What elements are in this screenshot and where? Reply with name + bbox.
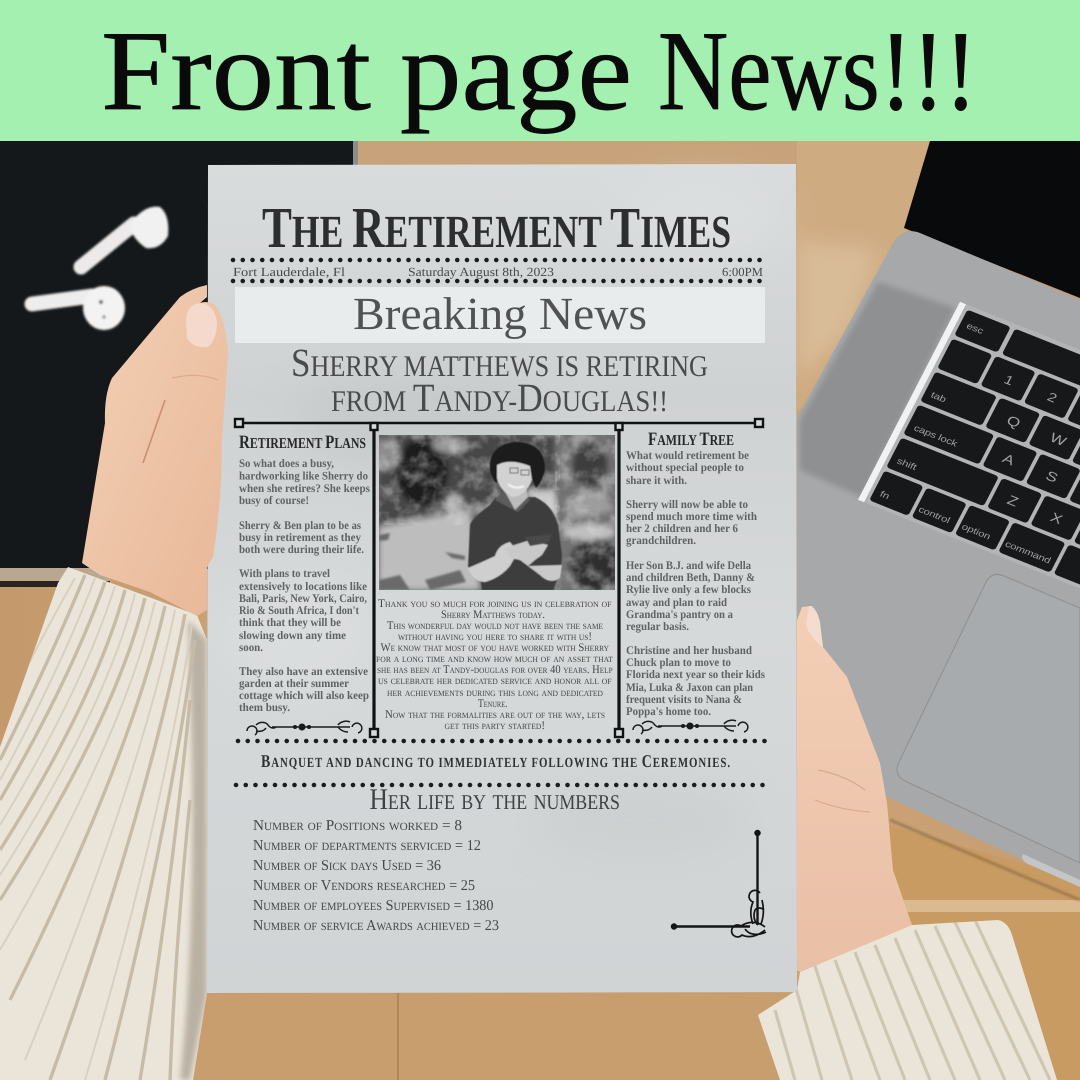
thumbnail [186,303,217,347]
retirement plans body text: busy of course! [239,494,309,507]
paper mottling [230,180,780,860]
panel: family tree [626,429,765,734]
retirement plans body text: So what does a busy, [239,457,334,470]
banquet notice: BANQUET AND DANCING TO IMMEDIATELY FOLLOWING THE CEREMONIES. [261,751,731,771]
banner title: News!!! [658,7,977,134]
center message: her achievements during this long and dedicated [387,686,603,699]
retirement plans body text: slowing down any time [239,629,346,642]
numbers heading: Her life by the numbers [370,783,620,816]
masthead title: THE RETIREMENT TIMES [262,195,731,260]
left flourish [247,721,362,735]
numbers list: Number of employees Supervised = 1380 [253,898,494,914]
numbers list: Number of service Awards achieved = 23 [253,918,499,934]
dateline: 6:00PM [722,265,763,279]
family tree heading: FAMILY TREE [648,429,734,450]
numbers list: Number of Vendors researched = 25 [253,878,475,894]
family tree body text: Poppa's home too. [626,705,711,718]
family tree body text: Christine and her husband [626,644,753,657]
family tree body text: Grandma's pantry on a [626,608,733,621]
retirement plans body text: With plans to travel [239,567,331,580]
retirement plans body text: both were during their life. [239,543,364,556]
center message: Sherry Matthews today. [441,608,545,621]
center message: Thank you so much for joining us in celebration of [378,597,612,610]
keyboard [849,290,1080,801]
laptop screen [904,141,1080,298]
retirement plans body text: Bali, Paris, New York, Cairo, [239,592,367,605]
family tree body text: Mia, Luka & Jaxon can plan [626,681,753,694]
retirement plans body text: Rio & South Africa, I don't [239,604,359,617]
fingernail [806,606,823,647]
right sweater sleeve [750,915,1070,1080]
dotted divider above banquet [238,739,767,743]
retirement plans body text [239,457,370,714]
header banner [0,0,1080,141]
retirement plans body text: cottage which will also keep [239,689,369,702]
family tree body text: regular basis. [626,620,689,633]
right hand holding the page [797,606,912,972]
numbers list: Number of Sick days Used = 36 [253,858,441,874]
center message: Now that the formalities are out of the way, lets [385,708,605,721]
dateline [233,260,763,281]
dateline: Fort Lauderdale, Fl [233,265,346,279]
center message: for a long time and know how much of an asset that [376,652,613,665]
trackpad [897,574,1080,863]
banner title [101,7,977,134]
center message: us celebrate her dedicated service and honor all of [378,674,612,687]
road shadows [379,533,466,590]
dateline: Saturday August 8th, 2023 [408,265,554,279]
family tree body text: without special people to [626,461,744,474]
numbers list: Number of departments serviced = 12 [253,838,481,854]
laptop [797,141,1080,887]
retirement plans body text: extensively to locations like [239,580,367,593]
center message: This wonderful day would not have been the same [387,619,603,632]
newspaper page [207,164,797,993]
retirement plans body text: Sherry & Ben plan to be as [239,519,361,532]
center message: Tenure. [478,697,508,710]
banner title: page [400,7,632,134]
numbers list: Number of Positions worked = 8 [253,818,462,834]
family tree body text: Sherry will now be able to [626,498,748,511]
column frame [235,419,763,737]
photo: smiling retiree [369,435,621,591]
paper sheet [207,164,797,993]
center message: she has been at Tandy-douglas for over 40 years. Help [377,663,613,676]
family tree body text: grandchildren. [626,534,696,547]
breaking news banner: Breaking News [353,288,647,339]
headline: FROM TANDY-DOUGLAS!! [331,375,668,420]
center message: without having you here to share it with us! [398,630,592,643]
retirement plans body text: them busy. [239,701,290,714]
headline: SHERRY MATTHEWS IS RETIRING [291,340,708,385]
dotted divider below banquet [236,783,767,787]
family tree body text: frequent visits to Nana & [626,693,742,706]
left sweater sleeve [0,560,210,1080]
retirement plans body text: garden at their summer [239,677,349,690]
dark notebook [0,141,358,587]
retirement plans body text: hardworking like Sherry do [239,470,368,482]
breaking news banner [235,287,765,343]
retirement plans body text: think that they will be [239,616,341,629]
center message [376,597,613,732]
family tree body text: Chuck plan to move to [626,656,731,669]
numbers list [253,818,499,934]
woman [468,442,562,590]
icon: earbuds [32,207,168,330]
family tree body text [626,449,765,718]
left hand holding the page [82,285,228,616]
corner ornament [672,831,766,937]
banner title: Front [101,7,371,134]
family tree body text: her 2 children and her 6 [626,522,738,535]
family tree body text: Rylie live only a few blocks [626,583,751,596]
family tree body text: share it with. [626,474,687,487]
retirement plans body text: soon. [239,641,263,654]
retirement plans body text: They also have an extensive [239,665,368,678]
laptop body [797,231,1080,886]
headline [291,340,708,420]
family tree body text: Florida next year so their kids [626,668,765,681]
center message: get this party started! [444,719,545,732]
center message: We know that most of you have worked with Sherry [380,641,609,654]
family tree body text: spend much more time with [626,510,758,523]
retirement plans body text: busy in retirement as they [239,531,361,544]
retirement plans heading: RETIREMENT PLANS [239,432,366,453]
photo background [379,435,615,590]
right flourish [633,720,748,734]
family tree body text: What would retirement be [626,449,749,462]
foliage texture [379,435,615,590]
panel: retirement plans [239,432,370,735]
family tree body text: Her Son B.J. and wife Della [626,559,751,572]
family tree body text: away and plan to raid [626,596,728,609]
family tree body text: and children Beth, Danny & [626,571,755,584]
retirement plans body text: when she retires? She keeps [239,482,370,495]
